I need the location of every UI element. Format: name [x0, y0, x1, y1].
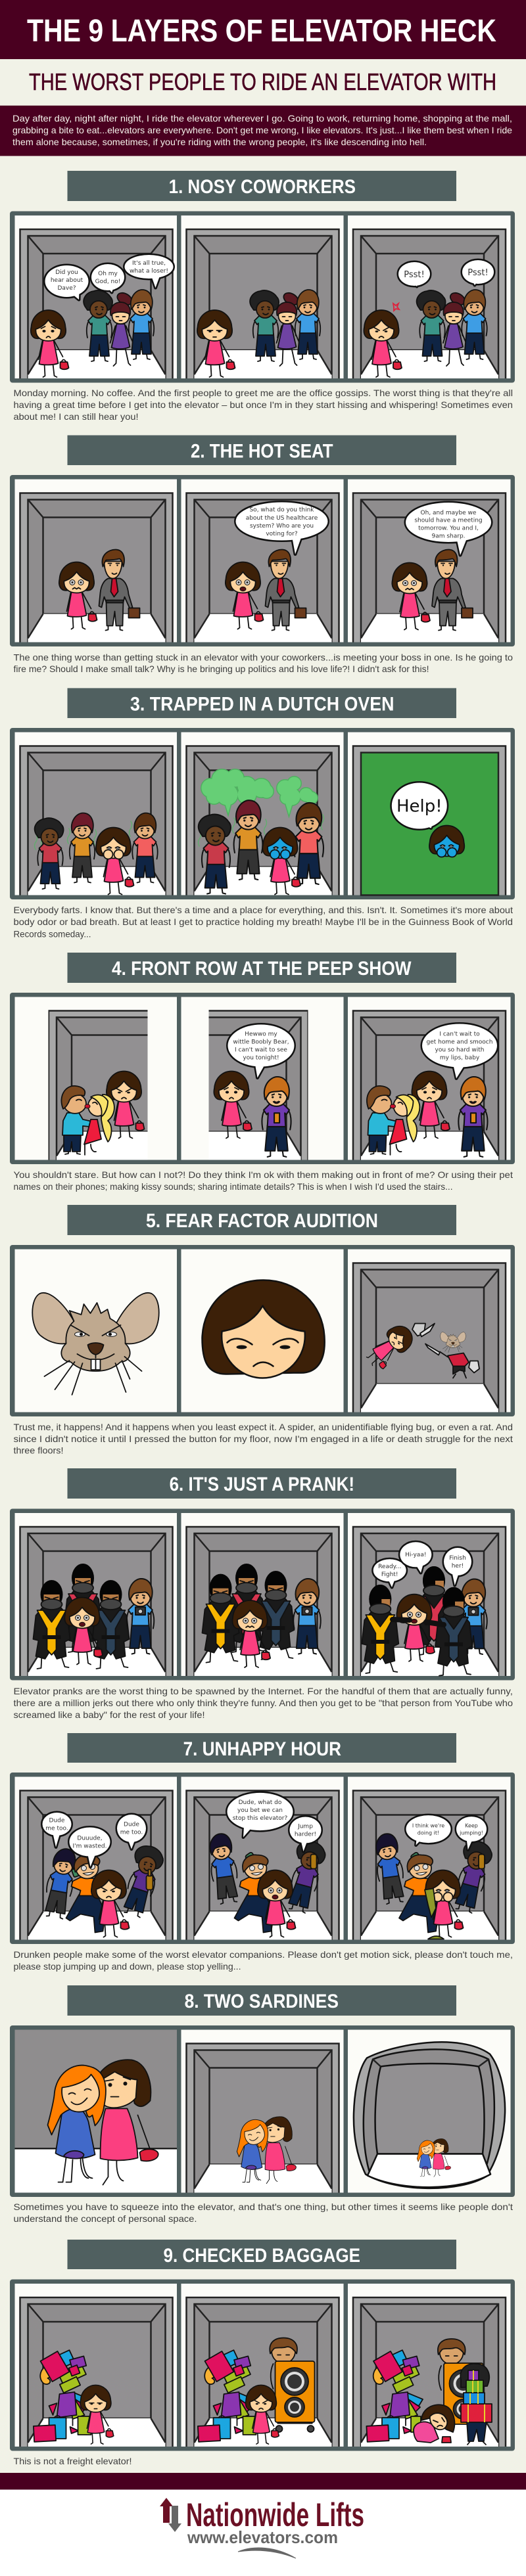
speech bubble: what a loser!	[130, 268, 168, 275]
speech bubble	[235, 502, 327, 554]
icon: down arrow	[168, 2506, 181, 2532]
speech bubble: wittle Boobly Bear,	[233, 1039, 289, 1046]
heading 1	[67, 171, 456, 201]
panel 9-3	[353, 2297, 506, 2447]
speech bubble: me too.	[45, 1825, 68, 1832]
bottle	[245, 1852, 260, 1868]
bottle	[146, 1870, 153, 1889]
speech bubble	[373, 1559, 406, 1587]
panel 5-3: fight	[353, 1263, 506, 1412]
caption 6: there are a million jerks out there who only think they're funny. And then you get to be "that person from YouTube who	[13, 1698, 513, 1708]
panel 7-1	[20, 1791, 172, 1939]
speech bubble: Jump	[297, 1824, 313, 1830]
icon: up arrow	[160, 2498, 173, 2523]
speech bubble: Did you	[55, 269, 78, 276]
speech bubble	[456, 1817, 487, 1850]
panel 6-1	[20, 1527, 172, 1676]
rat fighter	[425, 1332, 479, 1378]
heading 8	[67, 1985, 456, 2016]
logo: Nationwide Lifts	[160, 2497, 364, 2558]
speech bubble: Duuude,	[77, 1836, 103, 1842]
caption 1: about me! I can still hear you!	[13, 411, 138, 422]
speech bubble: 9am sharp.	[431, 533, 466, 540]
caption 7: please stop jumping up and down, please stop yelling...	[13, 1961, 241, 1972]
speech bubble	[91, 264, 124, 292]
comic strip 3	[10, 728, 515, 899]
speech bubble: should have a meeting	[414, 518, 483, 524]
heading 1: 1. NOSY COWORKERS	[169, 176, 356, 198]
section 2: the hot seat	[10, 435, 515, 674]
caption 7: Drunken people make some of the worst elevator companions. Please don't get motion sick, please don't touch me,	[13, 1949, 513, 1960]
intro text band: them alone because, sometimes, if you're riding with the wrong people, it's like descending into hell.	[12, 137, 427, 147]
caption 3: Everybody farts. I know that. But there's a time and a place for everything, and this. Isn't. It. Sometimes it's more about	[13, 905, 513, 915]
speech bubble: system? Who are you	[250, 523, 314, 530]
caption 6	[13, 1686, 513, 1720]
caption 9: This is not a freight elevator!	[13, 2456, 132, 2466]
speech bubble: voting for?	[266, 531, 298, 537]
logo url: www.elevators.com	[187, 2527, 338, 2547]
speech bubble	[406, 1815, 451, 1845]
speech bubble: Help!	[396, 796, 442, 816]
caption 5	[13, 1422, 513, 1456]
speech bubble: Psst!	[467, 268, 489, 278]
speech bubble: Dude	[124, 1821, 139, 1828]
logo name: Nationwide Lifts	[186, 2497, 364, 2533]
caption 2	[13, 652, 513, 674]
bottle	[72, 1868, 80, 1878]
bottle	[310, 1854, 317, 1868]
caption 8: Sometimes you have to squeeze into the elevator, and that's one thing, but other times it seems like people don't	[13, 2202, 513, 2212]
speech bubble: Dave?	[57, 285, 76, 292]
panel 3-2	[187, 746, 339, 895]
caption 5: three floors!	[13, 1445, 63, 1456]
speech bubble	[117, 1815, 146, 1849]
speech bubble: So, what do you think	[249, 507, 314, 514]
speech bubble: her!	[452, 1563, 464, 1570]
speech bubble: tomorrow. You and I,	[418, 526, 479, 532]
speech bubble: doing it!	[418, 1830, 439, 1836]
speech bubble	[45, 265, 88, 300]
section 7: unhappy hour	[10, 1733, 515, 1972]
speech bubble: Finish	[449, 1555, 466, 1562]
caption 3: body odor or bad breath. But at least I get to practice holding my breath! Maybe I'll be in the Guinness Book of World	[13, 916, 513, 927]
caption 1: Monday morning. No coffee. And the first people to greet me are the office gossips. The worst thing is that they're all	[13, 388, 513, 398]
speech bubble: I think we're	[412, 1822, 444, 1829]
panel 7-2	[187, 1791, 339, 1939]
heading 3: 3. TRAPPED IN A DUTCH OVEN	[130, 693, 394, 715]
panel 6-2	[187, 1527, 339, 1676]
stink cloud	[201, 770, 274, 813]
panel 4-1: couple kissing	[49, 1010, 147, 1160]
anger mark	[393, 304, 399, 311]
panel 9-1	[20, 2297, 172, 2447]
speech bubble: stop this elevator?	[233, 1815, 287, 1822]
caption 5: since I didn't notice it until I pressed the button for my floor, now I'm engaged in a life or death struggle for the next	[13, 1434, 513, 1444]
speech bubble: you tonight!	[243, 1055, 279, 1062]
panel 5-2: woman's angry face	[203, 1280, 325, 1378]
heading 9	[67, 2240, 456, 2269]
caption 3	[13, 905, 513, 939]
comic strip 9	[10, 2280, 515, 2451]
bottle	[410, 1852, 425, 1868]
panel 1-1: gossip	[20, 229, 174, 378]
heading 9: 9. CHECKED BAGGAGE	[163, 2245, 360, 2267]
title banner	[0, 0, 526, 59]
panel 6-3	[353, 1527, 506, 1676]
panel 2-3	[353, 493, 506, 643]
heading 7: 7. UNHAPPY HOUR	[183, 1738, 341, 1760]
crouching woman	[411, 2405, 454, 2443]
intro text band: Day after day, night after night, I ride the elevator wherever I go. Going to work, returning home, shopping at the mall,	[12, 113, 512, 124]
comic strip 2	[10, 475, 515, 646]
caption 1	[13, 388, 513, 422]
speech bubble: I'm wasted.	[73, 1843, 107, 1850]
comic strip 7	[10, 1773, 515, 1944]
heading 4	[67, 953, 456, 983]
vomit	[425, 1888, 444, 1939]
panel 8-1: close up	[14, 2030, 177, 2193]
panel 4-2: phone talker	[209, 1010, 308, 1160]
speech bubble: Keep	[465, 1822, 478, 1829]
panel 2-1	[20, 493, 172, 643]
caption 5: Trust me, it happens! And it happens when you least expect it. A spider, an unidentifiable flying bug, or even a rat. And	[13, 1422, 513, 1432]
heading 2: 2. THE HOT SEAT	[191, 440, 333, 463]
speech bubble	[125, 255, 174, 288]
shopping bag	[78, 2416, 91, 2435]
panel 9-2	[187, 2297, 339, 2447]
panel 2-2	[187, 493, 339, 643]
section 6: it's just a prank	[10, 1468, 515, 1720]
caption 2: The one thing worse than getting stuck in an elevator with your coworkers...is meeting your boss in one. Is he going to	[13, 652, 513, 662]
section 3: trapped in a dutch oven	[10, 688, 515, 939]
panel 3-1	[20, 746, 172, 895]
speech bubble: Ready...	[378, 1564, 401, 1570]
speech bubble: God, no!	[95, 279, 120, 285]
speech bubble	[392, 783, 447, 829]
speech bubble	[398, 262, 430, 286]
shield and sword	[412, 1323, 435, 1336]
speech bubble: Fight!	[381, 1571, 398, 1578]
section 9: checked baggage	[10, 2240, 515, 2466]
speech bubble	[227, 1793, 293, 1837]
speech bubble: Oh my	[98, 271, 118, 277]
speech bubble	[400, 1542, 431, 1573]
speech bubble	[444, 1548, 471, 1585]
caption 6: screamed like a baby" for the rest of your life!	[13, 1709, 205, 1720]
caption 2: fire me? Should I make small talk? Why is he bringing up politics and his love life?! I didn't ask for this!	[13, 664, 429, 674]
gift stack person	[460, 2364, 492, 2445]
panel 7-3	[353, 1791, 506, 1939]
grabbing arms	[393, 1619, 444, 1625]
footer white area	[0, 2490, 526, 2576]
caption 7	[13, 1949, 513, 1972]
speech bubble	[70, 1828, 110, 1867]
caption 8	[13, 2202, 513, 2224]
speech bubble: you so hard with	[435, 1047, 484, 1054]
speech bubble: harder!	[295, 1832, 316, 1838]
panel 5-1: rat head	[32, 1293, 159, 1395]
comic strip 6	[10, 1508, 515, 1681]
speech bubble: I can't wait to see	[235, 1047, 287, 1054]
speech bubble: get home and smooch	[427, 1039, 492, 1046]
speech bubble: I can't wait to	[439, 1031, 480, 1038]
speech bubble: jumping!	[459, 1830, 483, 1836]
panel 8-3: fisheye view	[354, 2042, 505, 2188]
comic strip 5	[10, 1245, 515, 1416]
speech bubble	[227, 1025, 295, 1077]
caption 4: You shouldn't stare. But how can I not?! Do they think I'm ok with them making out in front of me? Or using their pet	[13, 1169, 513, 1180]
speech bubble: Hi-yaa!	[405, 1552, 426, 1558]
shopping bag	[243, 2416, 256, 2435]
comic strip 1	[10, 212, 515, 382]
heading 5: 5. FEAR FACTOR AUDITION	[146, 1210, 378, 1232]
intro text band	[0, 106, 526, 156]
logo swoosh	[238, 2548, 296, 2558]
caption 1: having a great time before I get into the elevator – but once I'm in they start hissing and whispering! Sometimes even	[13, 399, 513, 410]
section 4: front row at the peep show	[10, 953, 515, 1192]
speech bubble	[422, 1024, 497, 1079]
footer band	[0, 2473, 526, 2490]
speech bubble: you bet we can	[237, 1807, 283, 1814]
speech bubble: Oh, and maybe we	[421, 510, 477, 516]
section 8: two sardines	[10, 1985, 515, 2224]
panel 3-3: green gas	[353, 746, 506, 895]
speech bubble: about the US healthcare	[246, 515, 318, 522]
speech bubble: hear about	[51, 277, 84, 284]
heading 6: 6. IT'S JUST A PRANK!	[170, 1474, 354, 1495]
bottle	[479, 1854, 485, 1868]
intro text band: grabbing a bite to eat...elevators are everywhere. Don't get me wrong, I like elevators. It's just...I like them best when I ride	[12, 125, 512, 135]
panel 8-2: mid shot	[187, 2043, 339, 2193]
speaker man	[270, 2338, 314, 2432]
speech bubble: It's all true,	[132, 260, 166, 267]
speech bubble: my lips, baby	[440, 1055, 480, 1062]
heading 3	[67, 688, 456, 718]
comic strip 4	[10, 993, 515, 1164]
section 5: fear factor audition	[10, 1205, 515, 1456]
caption 8: understand the concept of personal space.	[13, 2213, 197, 2224]
panel 4-3: both	[353, 1010, 506, 1160]
speech bubble	[406, 503, 491, 555]
speech bubble	[289, 1817, 321, 1851]
speaker man	[438, 2339, 483, 2424]
stink cloud	[277, 777, 317, 815]
caption 4	[13, 1169, 513, 1192]
speech bubble: Psst!	[404, 270, 425, 280]
speech bubble: Dude, what do	[239, 1799, 282, 1806]
comic strip 8	[10, 2025, 515, 2197]
heading 2	[67, 435, 456, 465]
heading 8: 8. TWO SARDINES	[185, 1991, 339, 2012]
caption 4: names on their phones; making kissy sounds; sharing intimate details? This is when I wish I'd used the stairs...	[13, 1181, 452, 1192]
speech bubble	[462, 260, 494, 285]
panel 1-2: silence	[187, 229, 339, 378]
speech bubble: me too.	[120, 1829, 143, 1836]
heading 7	[67, 1733, 456, 1763]
heading 4: 4. FRONT ROW AT THE PEEP SHOW	[112, 958, 412, 980]
speech bubble	[42, 1813, 71, 1847]
section 1: nosy coworkers	[10, 171, 515, 422]
heading 5	[67, 1205, 456, 1235]
speech bubble: Hewwo my	[245, 1031, 277, 1038]
heading 6	[67, 1468, 456, 1499]
speech bubble: Dude	[49, 1817, 65, 1824]
panel 1-3: psst	[353, 229, 506, 378]
caption 3: Records someday...	[13, 929, 91, 939]
caption 6: Elevator pranks are the worst thing to be spawned by the Internet. For the handful of them that are actually funny,	[13, 1686, 513, 1696]
